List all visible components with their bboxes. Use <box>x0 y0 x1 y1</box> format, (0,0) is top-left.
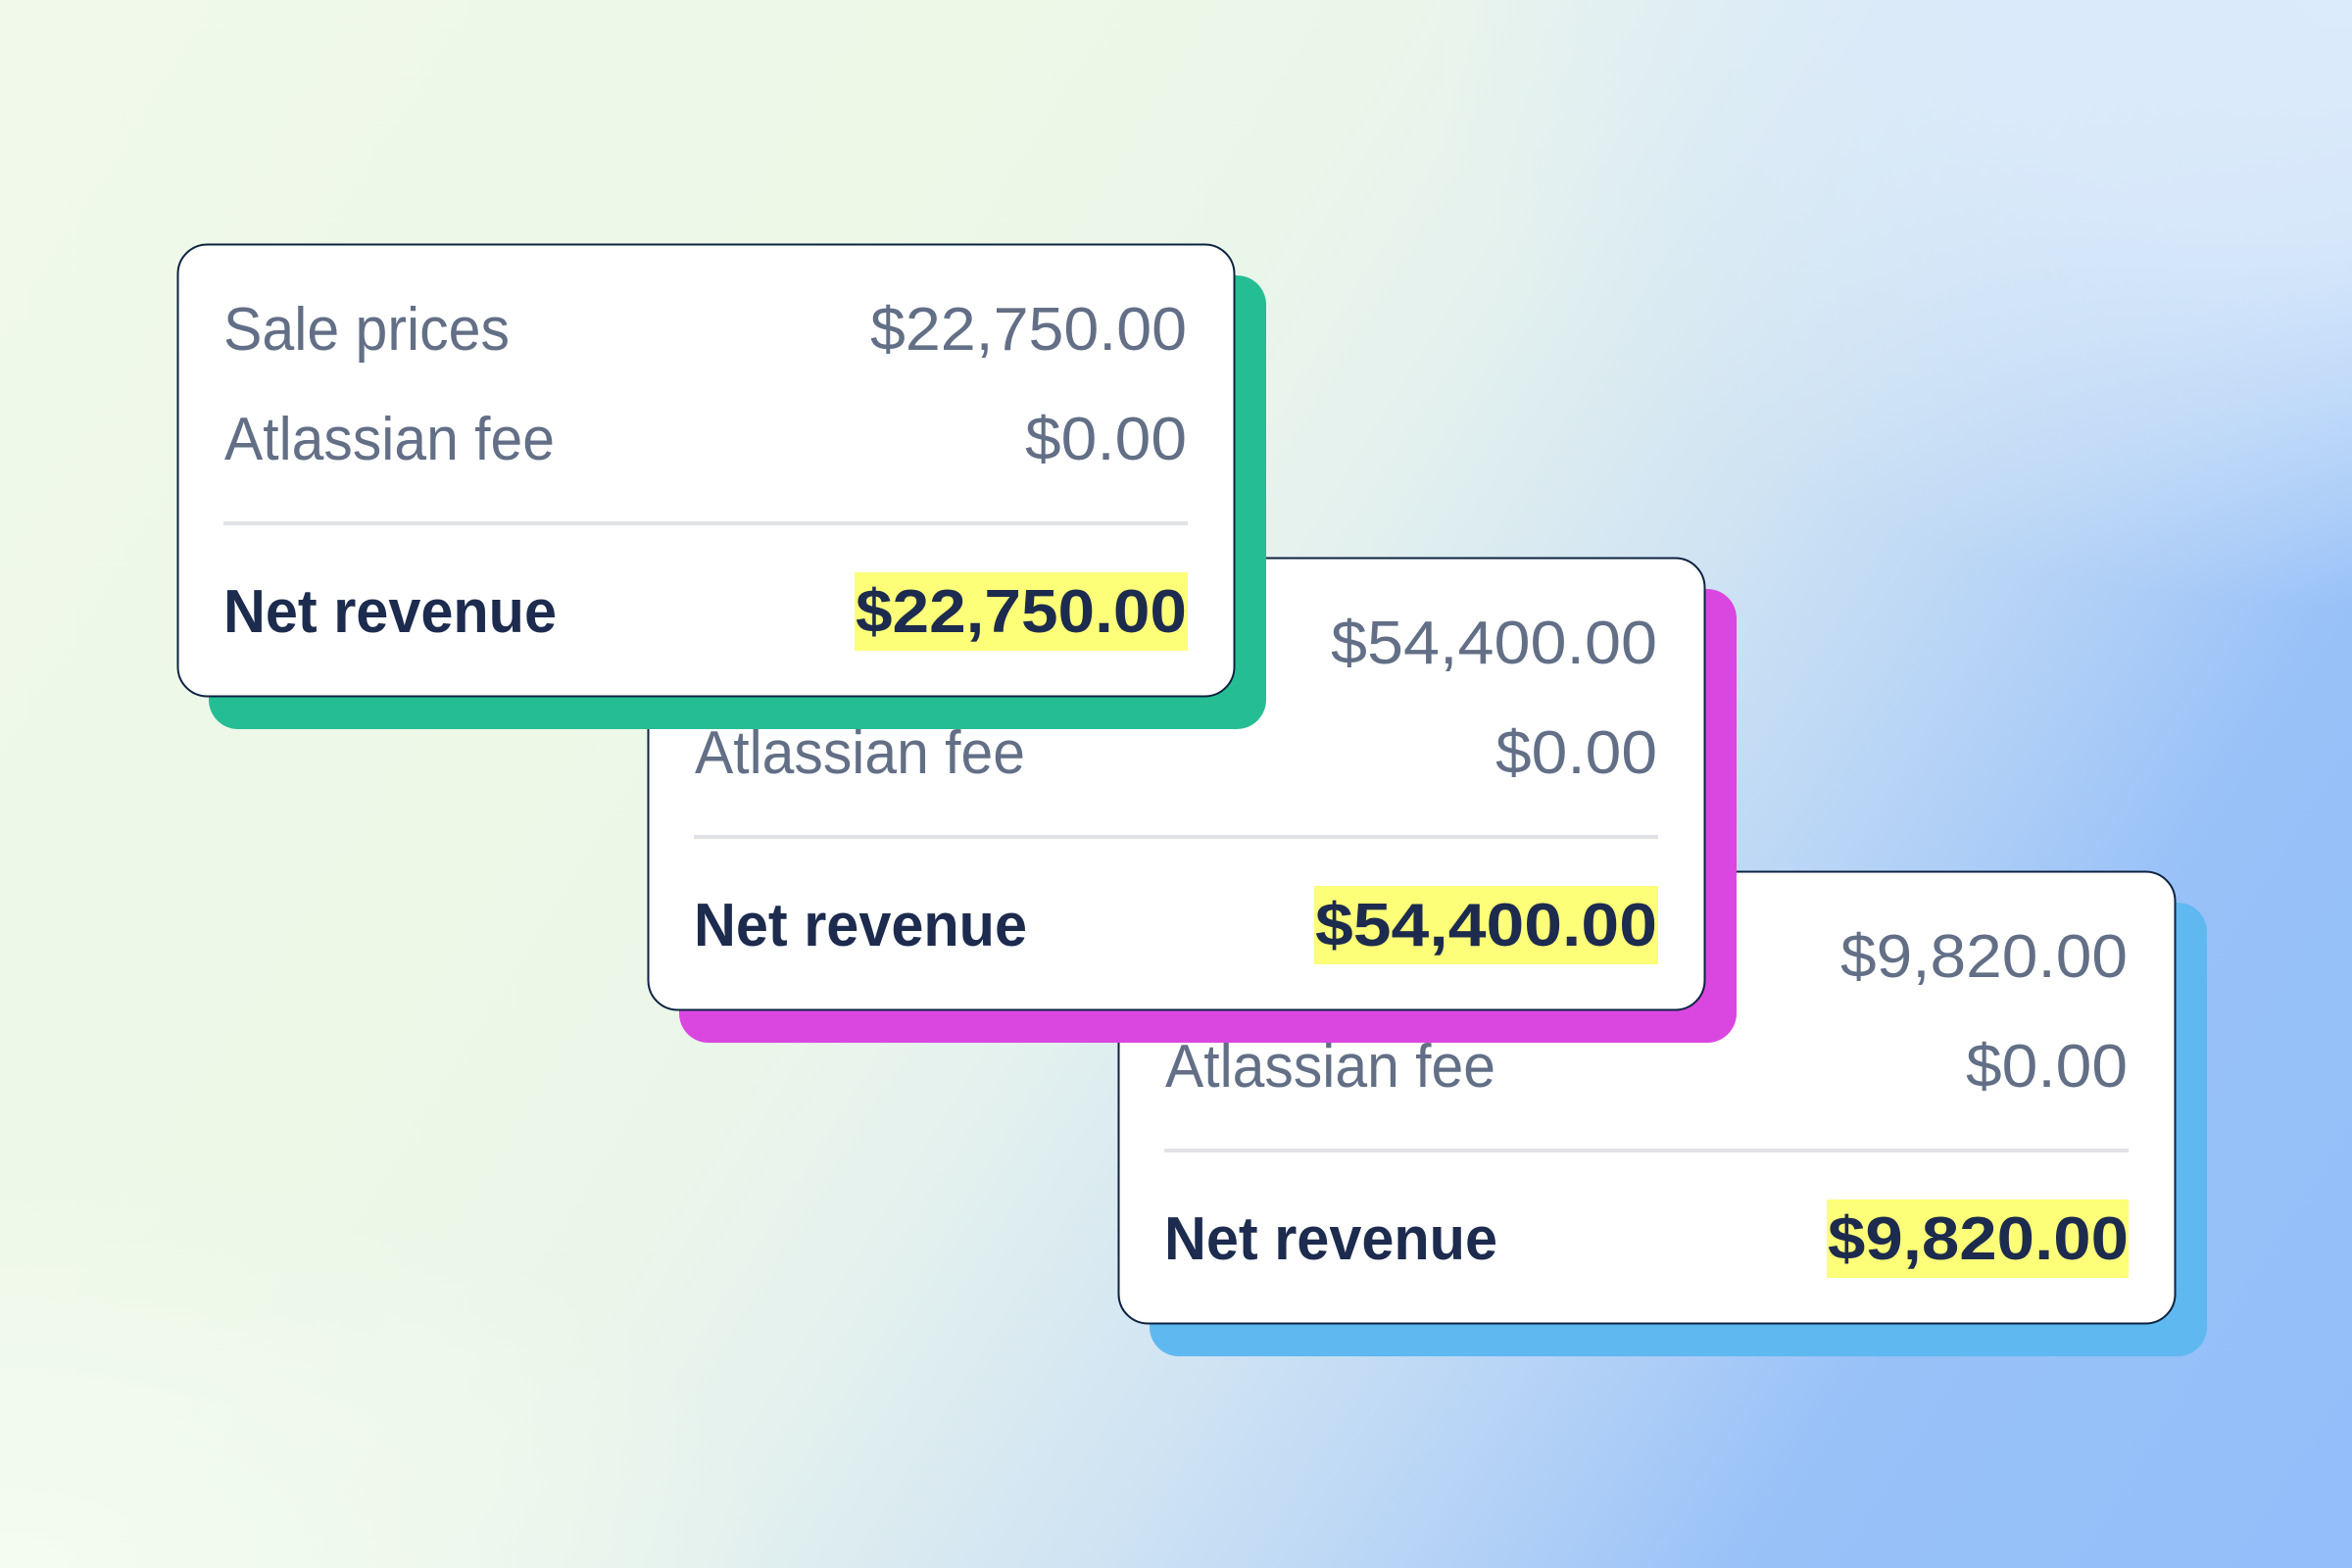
card 2 net revenue label: Net revenue <box>694 892 1027 959</box>
card 1 net revenue label: Net revenue <box>223 578 557 646</box>
card 3 blue offset shadow <box>1150 903 2207 1356</box>
card 2 magenta offset shadow <box>679 589 1737 1043</box>
card 1 fee label: Atlassian fee <box>224 406 555 473</box>
card 3 fee value: $0.00 <box>1966 1033 2128 1101</box>
card 2 fee value: $0.00 <box>1495 719 1657 787</box>
card 2 highlighted total: $54,400.00 <box>1315 892 1657 959</box>
card 3 white surface <box>1119 872 2176 1323</box>
card 1 white surface <box>178 245 1235 696</box>
card 1 highlighted total: $22,750.00 <box>856 578 1187 646</box>
card 2 fee label: Atlassian fee <box>695 719 1025 787</box>
card 3 sale price value: $9,820.00 <box>1840 923 2128 991</box>
card 1 sale price value: $22,750.00 <box>870 296 1187 364</box>
card 1 green offset shadow <box>209 275 1266 729</box>
panel: card 3, $9,820.00 <box>1119 872 2207 1356</box>
card 2 white surface <box>649 559 1705 1009</box>
card 3 net revenue label: Net revenue <box>1164 1205 1497 1273</box>
card 1 fee value: $0.00 <box>1025 406 1187 473</box>
card 3 fee label: Atlassian fee <box>1165 1033 1495 1101</box>
card 2 sale price value: $54,400.00 <box>1331 610 1657 677</box>
card 1 sale price label: Sale prices <box>223 296 510 364</box>
card 3 highlighted total: $9,820.00 <box>1828 1205 2129 1273</box>
panel: card 2, $54,400.00 <box>649 559 1737 1043</box>
panel: card 1, $22,750.00 <box>178 245 1266 729</box>
